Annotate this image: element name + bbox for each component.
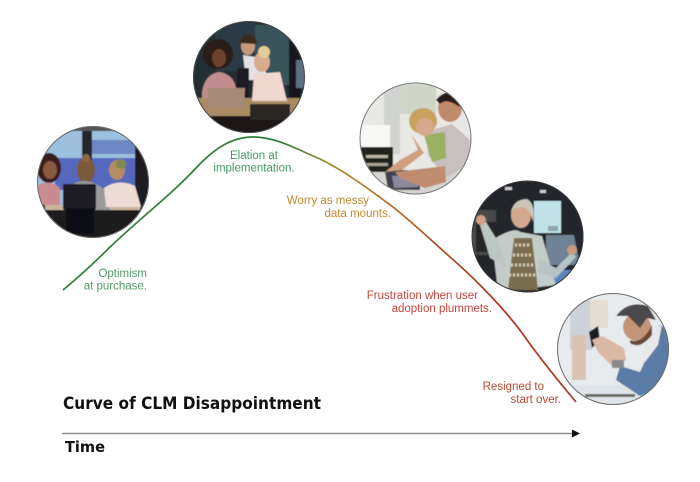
label: resigned: start over. <box>510 394 561 406</box>
photo ring 3 <box>360 83 471 194</box>
label: frustration: adoption plummets. <box>392 303 492 315</box>
label: worry: Worry as messy <box>287 195 369 207</box>
label: worry: data mounts. <box>325 208 391 220</box>
photo ring 1 <box>38 126 148 238</box>
photo: worried couple at computer <box>359 83 472 196</box>
label: elation: implementation. <box>213 162 295 174</box>
photo: team meeting at purchase <box>37 126 149 240</box>
label: resigned: Resigned to <box>483 381 544 393</box>
disappointment curve <box>63 137 576 402</box>
photo ring 2 <box>194 22 304 132</box>
time axis arrow <box>62 430 580 438</box>
photo: frustrated presenter <box>472 181 584 293</box>
label: frustration: Frustration when user <box>367 290 478 302</box>
axis label: time: Time <box>65 438 105 456</box>
title: Curve of CLM Disappointment <box>63 394 321 414</box>
photo: man resigned, head in hand <box>557 293 672 405</box>
label: optimism: Optimism <box>98 268 147 280</box>
label: elation: Elation at <box>230 150 279 162</box>
photo ring 5 <box>558 294 668 404</box>
photo ring 4 <box>472 181 583 292</box>
photo: colleagues at laptop <box>193 21 305 134</box>
label: optimism: at purchase. <box>84 280 147 292</box>
